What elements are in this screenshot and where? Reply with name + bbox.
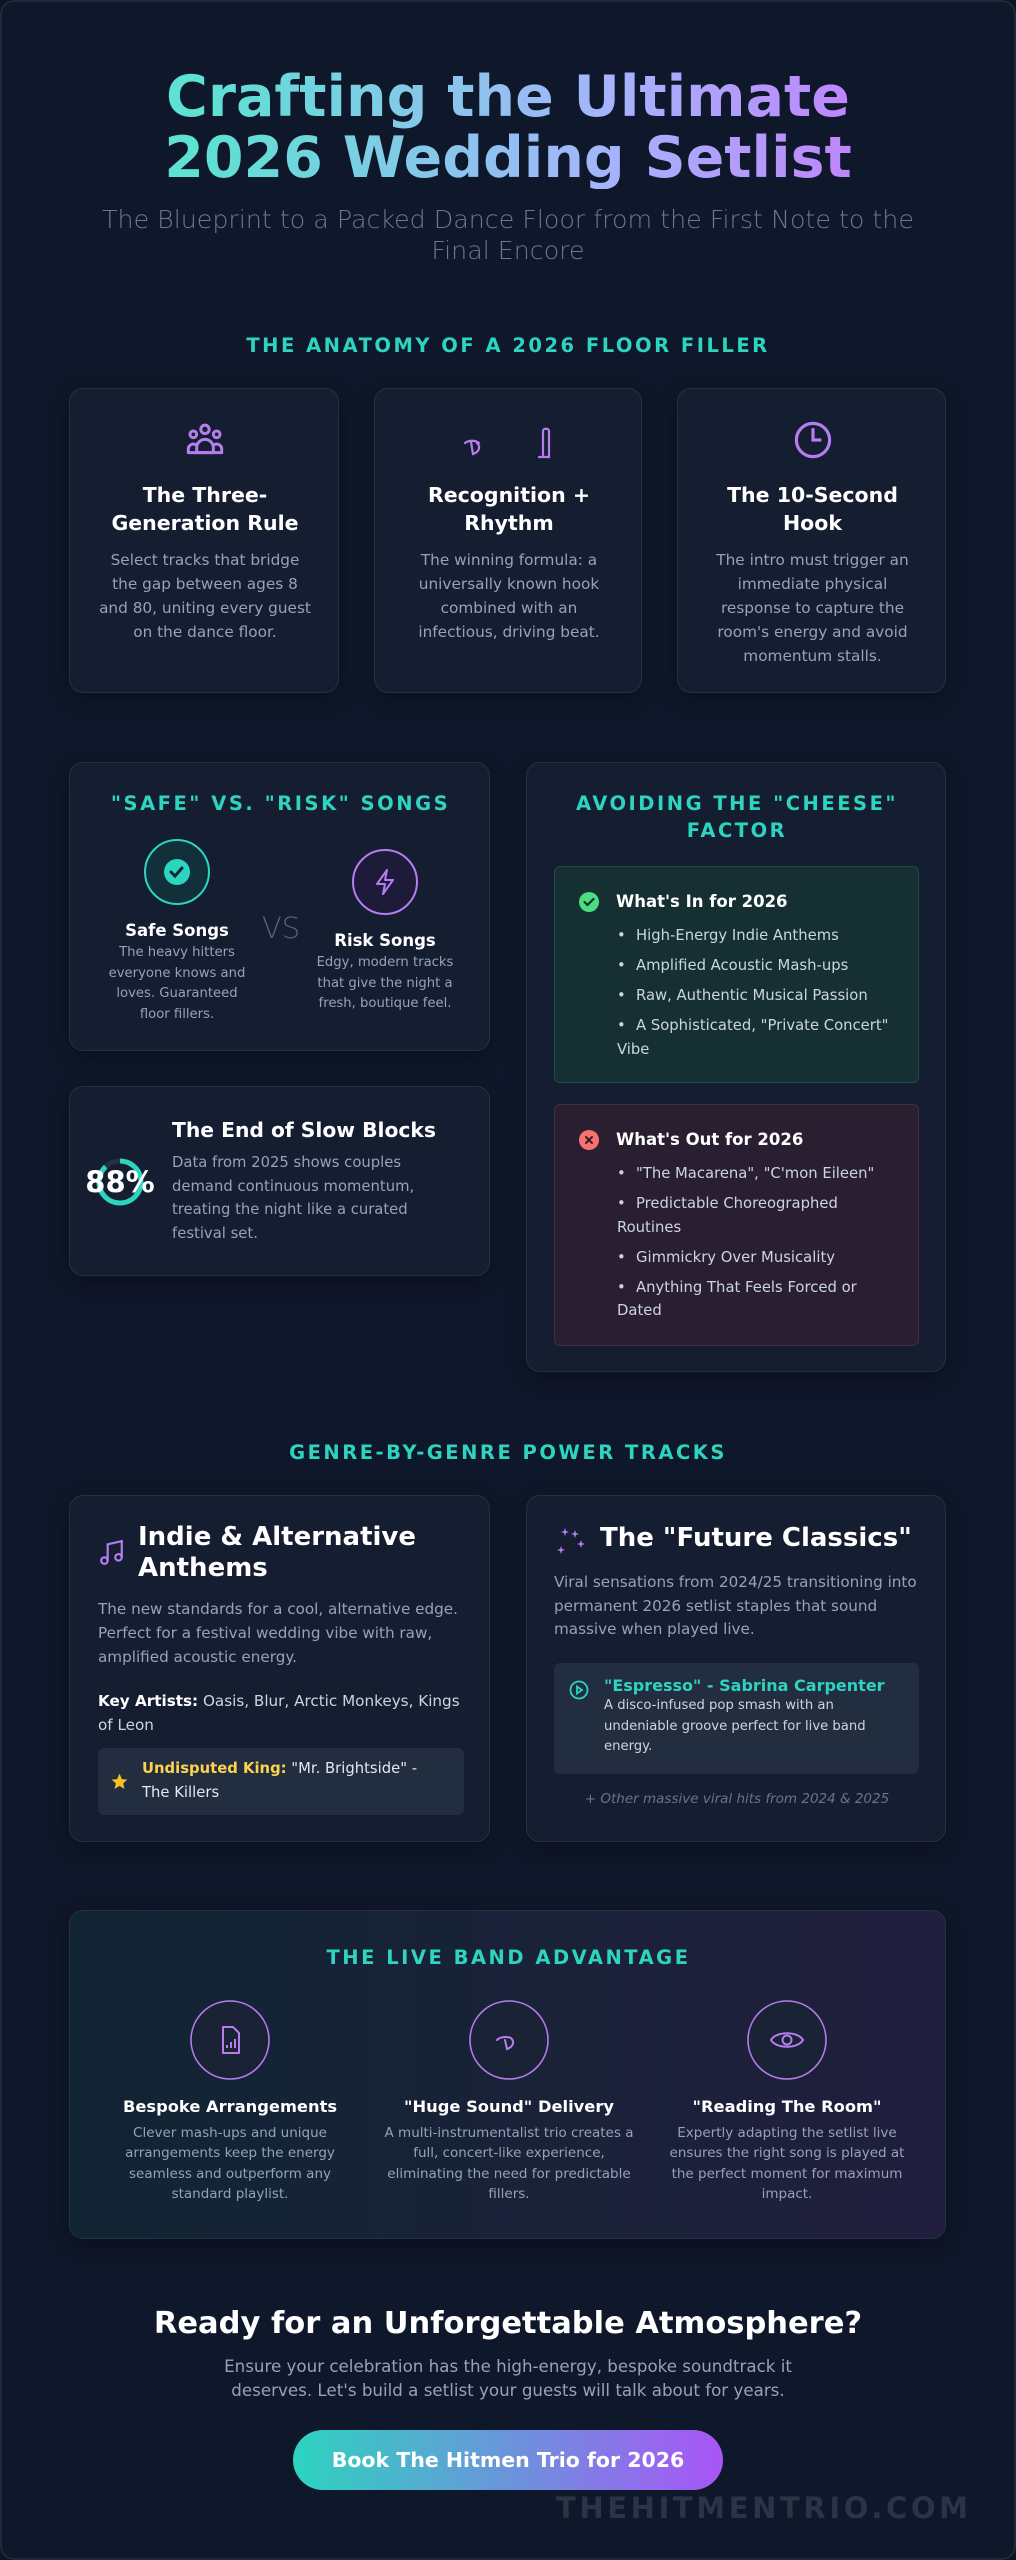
item: reading the room: Expertly adapting the setlist live ensures the right song is played at the perfect moment for maximum impact.: [670, 2125, 904, 2202]
callout: espresso: "Espresso" - Sabrina Carpenter: [604, 1676, 885, 1695]
box: what's out: [554, 1104, 919, 1346]
subtitle: [102, 205, 914, 265]
subtitle: Final Encore: [431, 236, 585, 265]
icon: check: [579, 892, 599, 912]
icon: safe check: [144, 839, 210, 905]
section heading: genre: GENRE-BY-GENRE POWER TRACKS: [289, 1441, 727, 1464]
title: Crafting the Ultimate: [166, 64, 850, 130]
title: 2026 Wedding Setlist: [164, 125, 852, 191]
icon: sparkles: [557, 1528, 585, 1554]
text: Select tracks that bridge the gap between ages 8 and 80, uniting every guest on the dance floor.: [99, 551, 311, 641]
heading: The "Future Classics": [600, 1523, 912, 1553]
list: Predictable Choreographed Routines: [617, 1195, 838, 1236]
risk songs text: Edgy, modern tracks that give the night a fresh, boutique feel.: [317, 955, 453, 1011]
callout: undisputed king: [98, 1748, 464, 1815]
title: [0, 67, 1016, 189]
heading: The 10-Second: [727, 483, 898, 507]
item: huge sound: "Huge Sound" Delivery: [404, 2097, 614, 2116]
panel: avoiding the cheese factor: [526, 762, 946, 1372]
item: huge sound: A multi-instrumentalist trio creates a full, concert-like experience, eliminating the need for predictable fillers.: [385, 2125, 633, 2202]
item: bespoke arrangements: Bespoke Arrangements: [123, 2097, 337, 2116]
heading: THE LIVE BAND ADVANTAGE: [326, 1946, 691, 1969]
panel: safe vs risk: [69, 762, 490, 1051]
list: [617, 1165, 874, 1319]
heading: The End of Slow Blocks: [172, 1118, 436, 1142]
icon: clock: [794, 422, 832, 458]
text: Viral sensations from 2024/25 transitioning into permanent 2026 setlist staples that sound massive when played live.: [554, 1573, 917, 1638]
risk songs text: Risk Songs: [334, 931, 436, 950]
callout: espresso: [554, 1663, 919, 1774]
list: Amplified Acoustic Mash-ups: [636, 957, 848, 974]
icon: eye: [747, 2000, 827, 2080]
item: huge sound: [384, 2000, 633, 2202]
heading: Hook: [783, 511, 842, 535]
heading: [428, 483, 590, 535]
heading: Rhythm: [464, 511, 554, 535]
callout: espresso: A disco-infused pop smash with an undeniable groove perfect for live band energy.: [604, 1698, 866, 1754]
cta text: Ensure your celebration has the high-energy, bespoke soundtrack it deserves. Let's build a setlist your guests will talk about for years.: [224, 2356, 792, 2400]
heading: AVOIDING THE "CHEESE" FACTOR: [576, 792, 898, 842]
panel: future classics: [526, 1495, 946, 1842]
icon: music note: [100, 1540, 123, 1565]
heading: The Three-Generation Rule: [111, 483, 299, 535]
heading: Indie & Alternative Anthems: [138, 1522, 416, 1583]
cta button: [293, 2430, 723, 2490]
text: Data from 2025 shows couples demand continuous momentum, treating the night like a curated festival set.: [172, 1154, 414, 1242]
item: bespoke arrangements: Clever mash-ups and unique arrangements keep the energy seamless and outperform any standard playlist.: [125, 2125, 335, 2202]
text: The winning formula: a universally known hook combined with an infectious, driving beat.: [418, 551, 600, 641]
box: what's in: [554, 866, 919, 1083]
list: •: [617, 1278, 626, 1296]
footnote: + Other massive viral hits from 2024 & 2025: [585, 1791, 889, 1807]
list: •: [617, 1017, 626, 1034]
icon: risk bolt: [352, 849, 418, 915]
list: A Sophisticated, "Private Concert" Vibe: [617, 1017, 888, 1058]
icon: music: [464, 428, 550, 458]
panel: three-generation rule: [69, 388, 339, 693]
item: bespoke arrangements: [123, 2000, 337, 2202]
panel: 10-second hook: [677, 388, 946, 693]
item: reading the room: [670, 2000, 904, 2202]
text: The intro must trigger an immediate physical response to capture the room's energy and avoid momentum stalls.: [716, 551, 909, 665]
heading: [727, 483, 898, 535]
safe songs text: The heavy hitters everyone knows and loves. Guaranteed floor fillers.: [109, 945, 245, 1022]
item: reading the room: "Reading The Room": [693, 2097, 881, 2116]
list: •: [617, 1165, 626, 1182]
list: •: [617, 957, 626, 974]
list: Gimmickry Over Musicality: [636, 1248, 835, 1266]
cta heading: Ready for an Unforgettable Atmosphere?: [154, 2306, 862, 2341]
list: •: [617, 987, 626, 1004]
list: Raw, Authentic Musical Passion: [636, 987, 868, 1004]
text: The new standards for a cool, alternative edge. Perfect for a festival wedding vibe with raw, amplified acoustic energy.: [98, 1600, 458, 1666]
stat ring 88%: 88%: [85, 1165, 155, 1199]
icon: sound: [469, 2000, 549, 2080]
heading: "SAFE" VS. "RISK" SONGS: [111, 792, 450, 815]
panel: end of slow blocks: [69, 1086, 490, 1276]
callout: undisputed king: Undisputed King: "Mr. Brightside" - The Killers: [142, 1760, 417, 1800]
icon: people: [186, 424, 224, 454]
icon: star: [112, 1774, 128, 1789]
list: •: [617, 927, 626, 944]
key artists: Key Artists: Oasis, Blur, Arctic Monkeys, Kings of Leon: [98, 1692, 460, 1734]
cta button: Book The Hitmen Trio for 2026: [332, 2448, 684, 2472]
heading: Recognition +: [428, 483, 590, 507]
watermark: THEHITMENTRIO.COM: [556, 2491, 972, 2525]
icon: cross: [579, 1130, 599, 1150]
safe songs text: Safe Songs: [125, 921, 229, 940]
section heading: anatomy: THE ANATOMY OF A 2026 FLOOR FILLER: [246, 334, 770, 357]
list: "The Macarena", "C'mon Eileen": [636, 1165, 874, 1182]
vs label: VS: [262, 911, 300, 945]
list: •: [617, 1248, 626, 1266]
panel: recognition + rhythm: [374, 388, 642, 693]
panel: indie & alternative: [69, 1495, 490, 1842]
list: •: [617, 1195, 626, 1212]
icon: play: [570, 1680, 588, 1700]
heading: What's Out for 2026: [616, 1130, 803, 1149]
list: Anything That Feels Forced or Dated: [617, 1278, 857, 1319]
heading: What's In for 2026: [616, 892, 788, 911]
icon: document chart: [190, 2000, 270, 2080]
list: [617, 927, 888, 1058]
subtitle: The Blueprint to a Packed Dance Floor from the First Note to the: [102, 205, 914, 234]
list: High-Energy Indie Anthems: [636, 927, 839, 944]
panel: live band advantage: [69, 1910, 946, 2239]
